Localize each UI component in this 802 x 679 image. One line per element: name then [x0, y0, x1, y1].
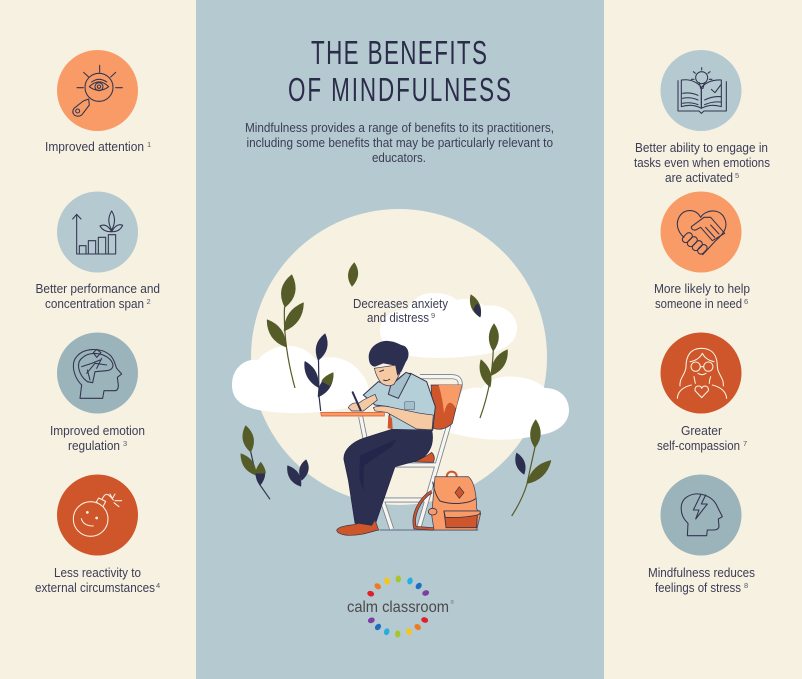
benefit: better ability to engage: are activated: [665, 171, 733, 185]
benefit: greater self-compassion: 7: [743, 439, 747, 448]
title: THE BENEFITS: [311, 34, 487, 71]
logo petals: [366, 576, 430, 638]
student at desk illustration: [321, 341, 481, 535]
benefit: improved emotion regulation: Improved emotion: [50, 424, 145, 438]
caption: decreases anxiety: Decreases anxiety: [353, 297, 449, 311]
intro text: including some benefits that may be particularly relevant to: [246, 136, 553, 150]
benefit: reduces stress: [648, 474, 755, 595]
title: [288, 34, 511, 108]
benefit: more likely to help: More likely to help: [654, 282, 750, 296]
icon: handshake heart: [677, 211, 726, 255]
benefit: improved attention: [45, 50, 151, 154]
benefit: greater self-compassion: [657, 332, 747, 453]
icon: smiling bomb: [73, 494, 122, 536]
icon: woman with glasses and heart: [677, 348, 727, 398]
logo: calm classroom: calm classroom: [347, 599, 449, 616]
benefit: better ability to engage: Better ability to engage in: [635, 141, 768, 155]
clouds: [232, 293, 569, 440]
logo: calm classroom: ®: [450, 599, 454, 606]
icon: rising bars with plant: [73, 211, 123, 254]
benefit: better ability to engage: tasks even when emotions: [634, 156, 770, 170]
benefit: better ability to engage: 5: [735, 171, 739, 180]
benefit: less reactivity: [35, 474, 160, 595]
icon: open book with bulb: [678, 68, 726, 113]
benefit: less reactivity: 4: [156, 581, 160, 590]
benefit: better performance: 2: [146, 297, 151, 306]
benefit: more likely to help: [654, 192, 750, 311]
benefit: greater self-compassion: self-compassion: [657, 439, 740, 453]
benefit: greater self-compassion: Greater: [681, 424, 722, 438]
benefit: less reactivity: external circumstances: [35, 581, 155, 595]
benefit: better ability to engage: [634, 50, 770, 185]
logo: calm classroom: [347, 576, 454, 638]
icon: head with lightning bolt: [681, 494, 722, 536]
caption: decreases anxiety: [353, 297, 449, 325]
benefit: reduces stress: 8: [744, 581, 748, 590]
benefit: reduces stress: feelings of stress: [655, 581, 741, 595]
benefit: better performance: concentration span: [45, 297, 144, 311]
benefit: better performance: Better performance and: [36, 282, 160, 296]
benefit: improved attention: 1: [147, 140, 151, 149]
intro text: educators.: [372, 151, 426, 165]
benefit: more likely to help: someone in need: [655, 297, 742, 311]
caption: decreases anxiety: and distress: [367, 311, 429, 325]
intro text: [245, 121, 554, 165]
intro text: Mindfulness provides a range of benefits to its practitioners,: [245, 121, 554, 135]
benefit: better performance: [36, 192, 160, 311]
caption: decreases anxiety: 9: [431, 311, 435, 320]
illustration backdrop: moon circle: [251, 209, 547, 505]
icon: head with brain: [73, 349, 122, 398]
benefit: less reactivity: Less reactivity to: [54, 566, 141, 580]
title: OF MINDFULNESS: [288, 71, 511, 108]
benefit: more likely to help: 6: [744, 297, 748, 306]
leaves and plants: [241, 263, 551, 516]
benefit: reduces stress: Mindfulness reduces: [648, 566, 755, 580]
benefit: improved emotion regulation: 3: [123, 439, 127, 448]
panel: centre: [196, 0, 604, 679]
icon: magnifier over eye: [73, 65, 122, 116]
benefit: improved attention: Improved attention: [45, 140, 144, 154]
benefit: improved emotion regulation: [50, 332, 145, 453]
benefit: improved emotion regulation: regulation: [68, 439, 120, 453]
